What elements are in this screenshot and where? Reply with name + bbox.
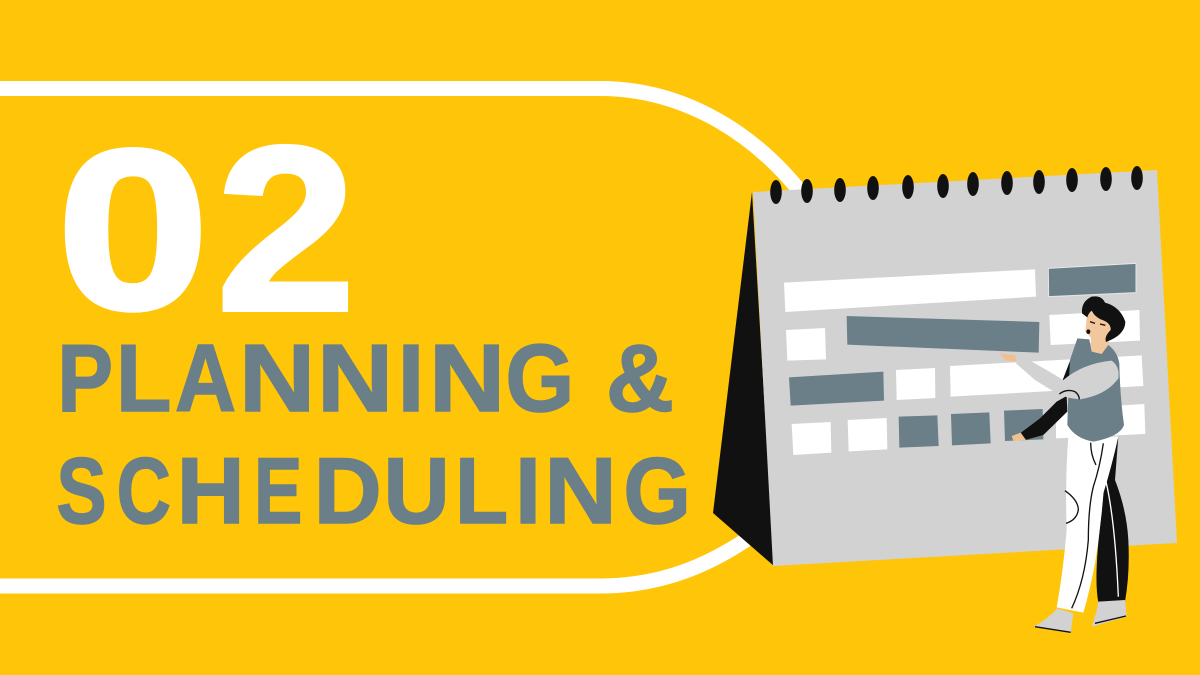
- hair: [1082, 296, 1125, 342]
- section number: [57, 97, 356, 360]
- upper arm sleeve: [1016, 355, 1119, 399]
- neck: [1091, 333, 1109, 354]
- front leg: [1057, 437, 1118, 613]
- title: U: [384, 438, 450, 543]
- title: S: [56, 438, 107, 543]
- face: [1085, 312, 1113, 341]
- vest: [1067, 338, 1124, 442]
- back leg highlight: [1106, 482, 1118, 597]
- back arm sliver: [1063, 354, 1073, 380]
- calendar page: [753, 170, 1177, 566]
- title: N: [239, 325, 315, 432]
- lower hand: [1012, 433, 1026, 441]
- shoes: [1033, 600, 1127, 633]
- upper hand: [999, 353, 1017, 362]
- trouser lines: [1065, 443, 1103, 608]
- title: D: [314, 438, 382, 543]
- elbow line: [1059, 390, 1079, 399]
- title: C: [117, 438, 171, 543]
- title: I: [398, 325, 424, 432]
- title: N: [317, 325, 393, 432]
- shoe soles: [1035, 616, 1126, 632]
- title: G: [624, 438, 691, 543]
- eyebrows: [1090, 322, 1105, 325]
- title: &: [606, 325, 674, 432]
- back leg: [1096, 437, 1129, 602]
- section number: 2: [216, 97, 356, 360]
- section number: 0: [57, 104, 209, 357]
- desk calendar illustration: [713, 166, 1177, 566]
- title: L: [116, 325, 171, 432]
- title: I: [515, 438, 541, 543]
- title: E: [254, 438, 302, 543]
- title: N: [429, 325, 505, 432]
- calendar schedule blocks: [784, 263, 1145, 455]
- person arranging calendar blocks: [999, 296, 1129, 633]
- title: [56, 325, 691, 543]
- title: H: [177, 438, 245, 543]
- title: A: [175, 325, 236, 432]
- title: N: [544, 438, 617, 543]
- mouth: [1086, 329, 1090, 334]
- spiral binding rings: [770, 166, 1143, 204]
- title: L: [455, 438, 508, 543]
- title: P: [57, 325, 113, 432]
- lower arm sleeve: [1020, 396, 1067, 440]
- title: G: [506, 325, 574, 432]
- rounded white outline frame: [0, 88, 803, 586]
- calendar back stand: [713, 192, 774, 566]
